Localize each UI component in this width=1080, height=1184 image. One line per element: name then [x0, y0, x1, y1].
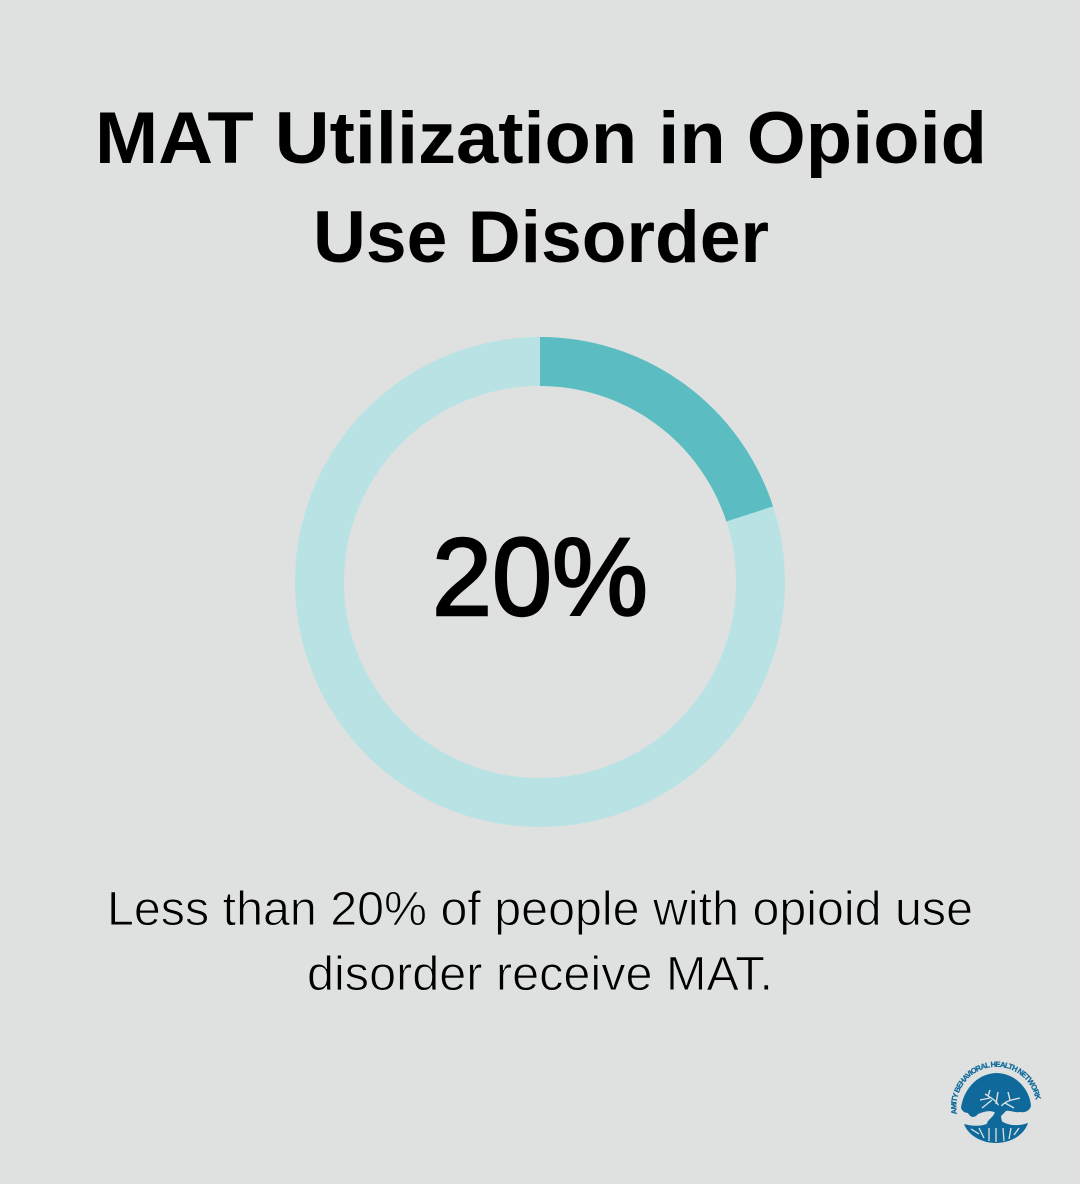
description text: disorder receive MAT. — [307, 948, 773, 1001]
description text — [107, 883, 973, 1001]
title: MAT Utilization in Opioid — [95, 98, 987, 179]
logo tree trunk — [987, 1105, 1004, 1124]
donut chart: 20% — [320, 362, 760, 802]
logo root highlights — [971, 1128, 1019, 1142]
title: Use Disorder — [313, 197, 769, 278]
logo tree crown — [961, 1073, 1031, 1117]
description text: Less than 20% of people with opioid use — [107, 883, 973, 936]
logo: Amity Behavioral Health Network — [950, 1061, 1042, 1143]
logo circular wordmark: AMITY BEHAVIORAL HEALTH NETWORK — [950, 1061, 1042, 1114]
donut value: 20% — [432, 516, 648, 639]
logo tree branches highlights — [980, 1090, 1020, 1109]
title — [95, 98, 987, 278]
logo roots bowl — [964, 1122, 1028, 1143]
